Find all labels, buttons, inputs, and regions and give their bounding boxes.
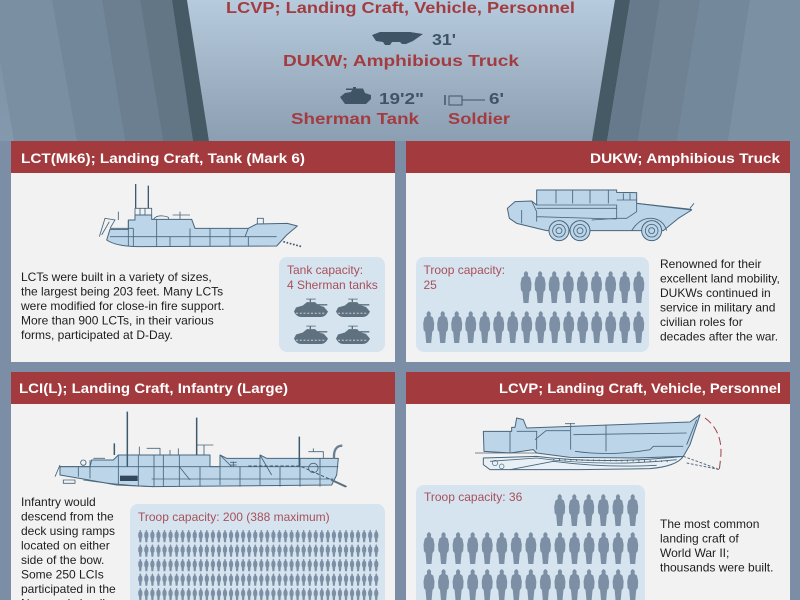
text: LCI description: Some 250 LCIs: [21, 568, 104, 582]
length: DUKW: 31': [432, 32, 456, 49]
panel: DUKW: [406, 141, 790, 362]
text: LCI description: participated in the: [21, 582, 116, 596]
label: DUKW: DUKW; Amphibious Truck: [283, 53, 519, 70]
text: LCT description: LCTs were built in a variety of sizes,: [21, 270, 212, 284]
troop capacity box: Troop capacity: 36: [424, 490, 523, 504]
illustration: DUKW truck: [507, 190, 694, 241]
text: DUKW description: service in military and: [660, 300, 775, 314]
text: LCT description: were modified for close-in fire support.: [20, 299, 224, 313]
text: LCT description: More than 900 LCTs, in their various: [21, 314, 214, 328]
text: DUKW description: civilian roles for: [660, 315, 743, 329]
heading: LCI: LCI(L); Landing Craft, Infantry (Large): [19, 380, 288, 396]
scale comparison: [226, 0, 575, 128]
text: DUKW description: Renowned for their: [660, 257, 761, 271]
icon: DUKW silhouette: [372, 32, 423, 45]
heading: LCI: [11, 372, 395, 404]
heading: LCT: LCT(Mk6); Landing Craft, Tank (Mark 6): [21, 150, 305, 166]
troop capacity box: [130, 504, 385, 600]
illustration: LCT ship: [99, 184, 302, 247]
label: Soldier: Soldier: [448, 111, 510, 128]
text: LCVP description: World War II;: [660, 546, 729, 560]
text: LCI description: descend from the: [21, 510, 114, 524]
panel: LCI: [11, 372, 395, 600]
icon: soldier top view: [445, 95, 485, 105]
text: LCI description: Infantry would: [21, 495, 96, 509]
tank capacity box: [279, 257, 385, 352]
text: DUKW description: decades after the war.: [660, 330, 778, 344]
text: DUKW description: DUKWs continued in: [660, 286, 771, 300]
text: LCVP description: thousands were built.: [660, 560, 773, 574]
text: LCT description: the largest being 203 feet. Many LCTs: [21, 284, 223, 298]
troop capacity box: Troop capacity:: [424, 263, 505, 277]
text: LCI description: located on either: [21, 538, 110, 552]
icon: Sherman tank silhouette: [340, 87, 371, 104]
text: LCT description: forms, participated at D-Day.: [21, 328, 173, 342]
illustration: LCVP boat: [475, 415, 721, 470]
text: LCI description: side of the bow.: [21, 553, 104, 567]
troop capacity box: 25: [424, 278, 437, 292]
panel: LCVP: [406, 372, 790, 600]
troop capacity box: Troop capacity: 200 (388 maximum): [138, 510, 330, 524]
illustration: LCI ship: [55, 412, 347, 487]
tank capacity box: 4 Sherman tanks: [287, 278, 378, 292]
heading: LCT: [11, 141, 395, 173]
text: LCI description: deck using ramps: [21, 524, 115, 538]
heading: DUKW: DUKW; Amphibious Truck: [590, 150, 780, 166]
label: Sherman Tank: Sherman Tank: [291, 111, 419, 128]
heading: LCVP: LCVP; Landing Craft, Vehicle, Personnel: [499, 380, 781, 396]
panel: LCT: [11, 141, 395, 362]
length: soldier: 6': [489, 91, 504, 108]
heading: LCVP: [406, 372, 790, 404]
troop capacity box: [416, 257, 649, 352]
tunnel backdrop: [0, 0, 800, 141]
tank capacity box: Tank capacity:: [287, 263, 363, 277]
text: DUKW description: excellent land mobility,: [660, 272, 780, 286]
troop capacity box: [416, 485, 645, 600]
text: LCVP description: landing craft of: [660, 532, 739, 546]
heading: DUKW: [406, 141, 790, 173]
text: LCVP description: The most common: [660, 517, 759, 531]
label: LCVP: LCVP; Landing Craft, Vehicle, Personnel: [226, 0, 575, 17]
length: Sherman tank: 19'2": [379, 91, 424, 108]
